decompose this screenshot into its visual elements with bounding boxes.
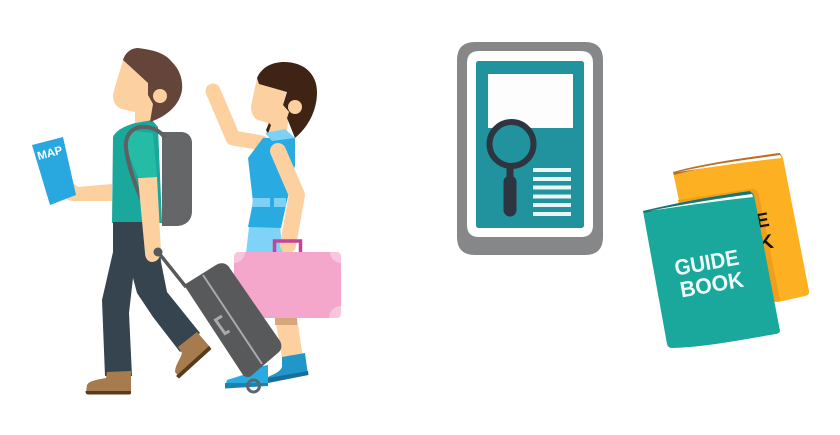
orange book spine edge [673, 153, 781, 175]
magnifier handle [504, 182, 516, 210]
icon: tablet with magnified document [457, 42, 603, 255]
title word GUIDE: GUIDE [673, 245, 741, 281]
woman hair [257, 62, 317, 138]
man ear [153, 89, 167, 103]
pink suitcase corners [234, 252, 341, 318]
woman belt [252, 198, 286, 207]
map label: MAP [36, 145, 64, 163]
man hair [123, 48, 182, 122]
man shirt [112, 120, 162, 223]
pink suitcase [234, 252, 341, 318]
orange book pages [678, 155, 782, 172]
woman front shoe sole [225, 383, 268, 388]
document image block [488, 74, 573, 128]
pink suitcase handle [274, 241, 300, 253]
illustration: guide books [643, 153, 809, 348]
grey suitcase body [184, 263, 281, 377]
grey suitcase wheel [248, 380, 260, 392]
magnifier lens [490, 122, 534, 166]
illustration: man traveller [32, 48, 281, 394]
grey suitcase clasp [216, 316, 230, 334]
document text lines [533, 168, 571, 216]
orange book [673, 153, 809, 302]
grey suitcase stripe [203, 275, 262, 364]
man back boot sole [86, 391, 131, 394]
man face and neck [113, 60, 155, 123]
teal book title [673, 245, 745, 302]
man rear arm [67, 183, 112, 201]
title letter E: E [754, 209, 771, 233]
illustration: woman traveller [213, 62, 341, 388]
document page [476, 61, 584, 228]
man sleeve [126, 131, 157, 177]
woman shorts [246, 227, 283, 253]
map [32, 137, 76, 205]
orange book title letters [754, 209, 776, 255]
magnifier neck [506, 166, 514, 178]
man front arm [138, 177, 161, 262]
orange book cover shadow [678, 189, 780, 302]
woman ear [288, 100, 302, 114]
orange book cover [673, 153, 809, 302]
grey suitcase handle [158, 252, 186, 287]
woman dress [248, 138, 295, 228]
woman face and neck [251, 78, 289, 134]
title letter K: K [757, 231, 776, 255]
map cover [32, 137, 76, 205]
tablet frame [457, 42, 603, 255]
teal book cover [643, 192, 780, 348]
man trousers [102, 222, 200, 376]
woman back shoe sole [268, 371, 308, 383]
woman raised arm [213, 91, 262, 143]
magnifying glass [490, 122, 534, 210]
man front boot sole [176, 346, 212, 378]
woman front shoe [225, 365, 268, 387]
woman leg shadow [275, 318, 297, 325]
man front boot [175, 332, 210, 377]
woman collar [265, 129, 295, 141]
woman leg [275, 318, 303, 358]
grey suitcase handle knob [154, 248, 162, 256]
backpack [162, 132, 192, 226]
backpack strap [126, 127, 165, 200]
title word BOOK: BOOK [678, 267, 745, 302]
woman back shoe [268, 353, 308, 382]
teal book pages [649, 194, 753, 211]
teal book spine edge [643, 191, 752, 213]
man back boot [86, 371, 131, 392]
woman front arm [278, 151, 297, 245]
teal book [643, 191, 780, 348]
